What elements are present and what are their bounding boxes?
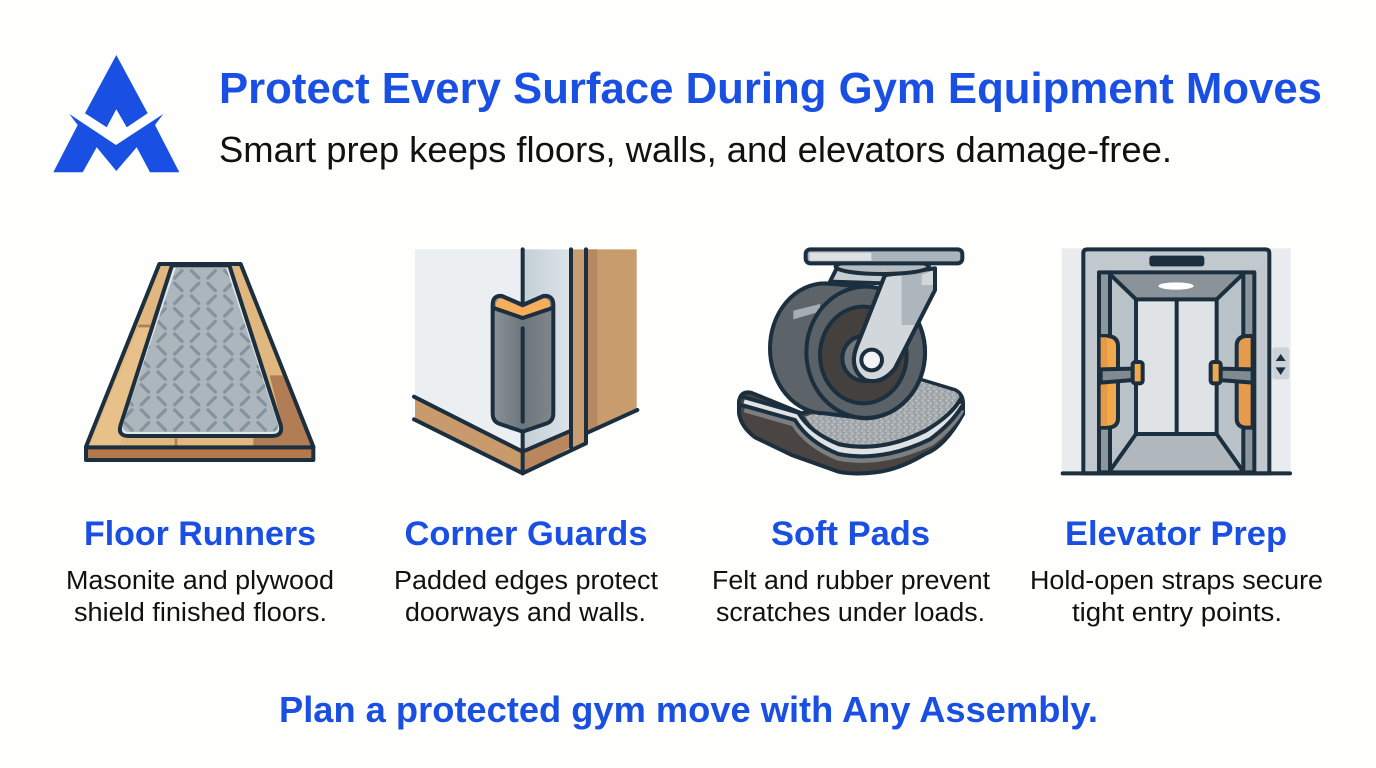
bracket back bbox=[830, 268, 885, 283]
pad base bbox=[739, 380, 963, 474]
call to action: Plan a protected gym move with Any Assembly. bbox=[279, 689, 1098, 730]
heading: Soft Pads: Soft Pads bbox=[771, 515, 930, 553]
right door strap bbox=[1237, 336, 1253, 428]
panel: soft pads bbox=[712, 249, 990, 627]
description: Floor Runners: shield finished floors. bbox=[74, 599, 327, 627]
logo: Any Assembly mark bbox=[53, 55, 179, 172]
description: Corner Guards: Padded edges protect bbox=[394, 567, 658, 595]
swivel bracket bbox=[854, 268, 935, 381]
plate bbox=[836, 259, 929, 274]
call buttons bbox=[1272, 347, 1289, 379]
description: Soft Pads bbox=[712, 567, 990, 627]
description: Floor Runners: Masonite and plywood bbox=[66, 567, 334, 595]
title: Protect Every Surface During Gym Equipment Moves bbox=[219, 64, 1322, 113]
description: Soft Pads: scratches under loads. bbox=[716, 599, 985, 627]
panel: elevator prep bbox=[1030, 248, 1323, 627]
heading: Elevator Prep: Elevator Prep bbox=[1065, 515, 1287, 553]
description: Soft Pads: Felt and rubber prevent bbox=[712, 567, 990, 595]
description: Elevator Prep bbox=[1030, 567, 1323, 627]
icon: floor runner bbox=[86, 263, 313, 460]
description: Elevator Prep: tight entry points. bbox=[1072, 599, 1282, 627]
icon: elevator bbox=[1062, 248, 1291, 473]
heading: Floor Runners: Floor Runners bbox=[84, 515, 316, 553]
description: Corner Guards bbox=[394, 567, 658, 627]
icon: caster on soft pad bbox=[739, 249, 963, 474]
panel: floor runners bbox=[66, 263, 334, 627]
left door strap bbox=[1101, 336, 1118, 428]
panel: corner guards bbox=[394, 249, 658, 627]
subtitle: Smart prep keeps floors, walls, and elevators damage-free. bbox=[219, 129, 1172, 170]
icon: corner guard bbox=[414, 249, 637, 473]
description: Corner Guards: doorways and walls. bbox=[405, 599, 646, 627]
description: Elevator Prep: Hold-open straps secure bbox=[1030, 567, 1323, 595]
heading: Corner Guards: Corner Guards bbox=[404, 515, 648, 553]
floor line bbox=[1063, 467, 1290, 479]
description: Floor Runners bbox=[66, 567, 334, 627]
wheel tread and face bbox=[770, 283, 925, 418]
